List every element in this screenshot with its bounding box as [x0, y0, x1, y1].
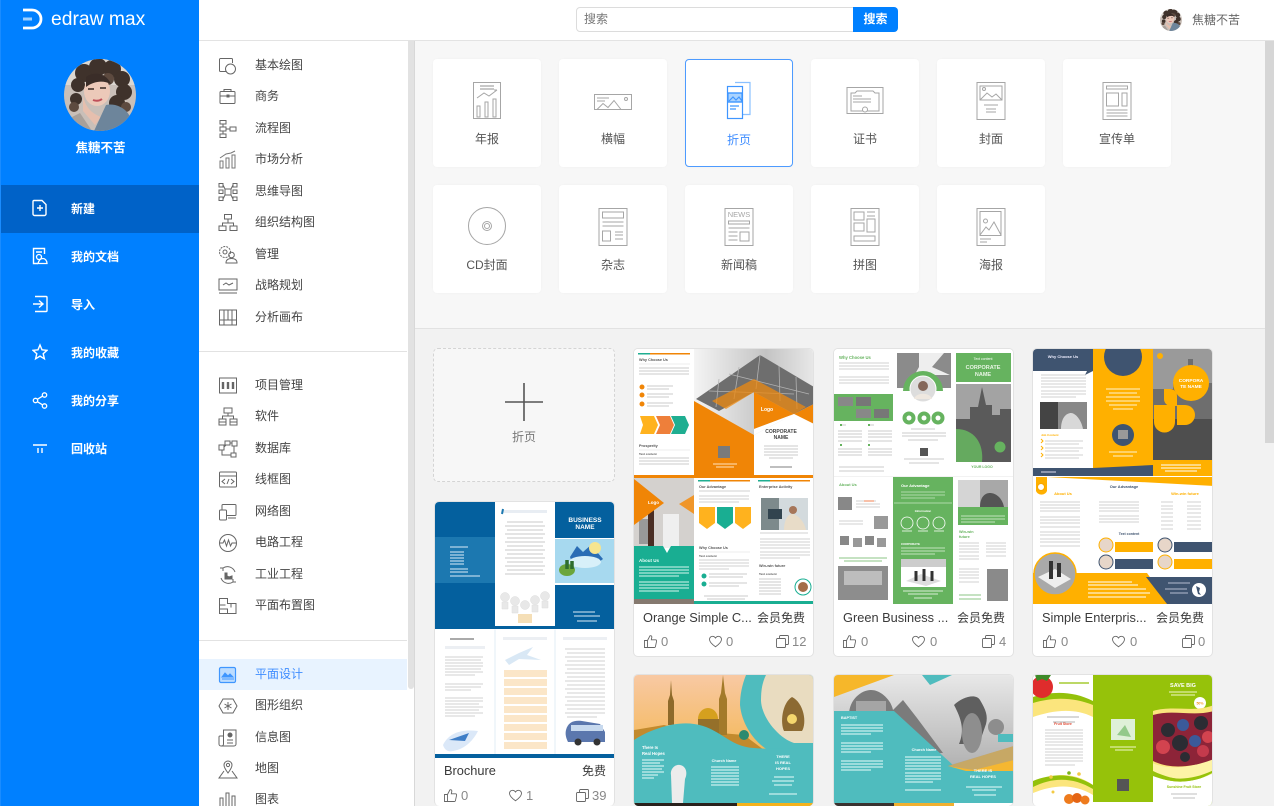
thumbnail: orange brochure: Win-win future — [759, 564, 785, 568]
template card: mosque brochure — [633, 674, 814, 806]
copy icon — [576, 789, 589, 802]
type card: 年报 — [433, 59, 541, 167]
category: 商务 — [220, 89, 279, 104]
thumbnail: green brochure: future — [959, 535, 970, 539]
category: 电路工程 — [219, 534, 303, 552]
thumbnail: church: BAPTIST — [841, 716, 858, 720]
price label: 免费 — [582, 764, 606, 778]
type card: 拼图 — [811, 185, 919, 293]
thumbnail: mosque: HOPES — [776, 766, 790, 771]
nav: 新建 active — [1, 185, 199, 233]
thumbnail: orange brochure: Prosperity — [639, 444, 659, 448]
thumbnail: fruit store: 50% — [1196, 702, 1204, 706]
page scrollbar — [1265, 41, 1274, 443]
category: 商务: 商务 — [255, 89, 279, 103]
category: 思维导图: 思维导图 — [255, 184, 303, 198]
category: 网络图: 网络图 — [255, 504, 291, 518]
thumbnail: church — [834, 675, 1014, 806]
thumbnail: orange brochure: Text content — [699, 554, 717, 558]
category: 管理 — [219, 246, 279, 264]
category: 信息图: 信息图 — [255, 730, 291, 744]
thumbnail: church: Church Name — [912, 748, 936, 752]
type card: 折页 active — [685, 59, 793, 167]
logo: edraw max — [51, 9, 145, 30]
heart icon — [912, 635, 925, 648]
category list panel — [199, 41, 415, 806]
heart count: 0 — [930, 634, 937, 649]
thumbnail: green brochure: Information — [915, 509, 931, 513]
thumbnail: green brochure: Why Choose Us — [839, 355, 872, 360]
thumbnail: blue brochure — [435, 502, 614, 758]
sidebar — [0, 0, 199, 806]
category: 线框图: 线框图 — [255, 472, 291, 486]
card title: Brochure — [444, 763, 496, 778]
category: 市场分析: 市场分析 — [255, 152, 303, 166]
category: 分析画布 — [219, 310, 303, 326]
like count: 0 — [661, 634, 668, 649]
type card: 新闻稿 — [685, 185, 793, 293]
thumbnail: blue brochure: NAME — [575, 524, 595, 531]
heart count: 0 — [726, 634, 733, 649]
thumbnail: yellow and navy brochure — [1033, 349, 1214, 605]
type card: 宣传单 — [1063, 59, 1171, 167]
thumbnail: fruit store: SAVE BIG — [1170, 683, 1196, 689]
thumbnail: yellow and navy brochure: Job Content — [1041, 433, 1058, 437]
category: 平面布置图: 平面布置图 — [255, 598, 315, 612]
thumbnail: yellow and navy brochure: Why Choose Us — [1048, 354, 1079, 359]
list scrollbar — [408, 41, 414, 689]
category: 平面布置图 — [219, 598, 315, 614]
price label: 会员免费 — [757, 611, 805, 625]
category: 平面设计 selected: 平面设计 — [255, 667, 303, 681]
thumbnail: fruit store: Fruit Store — [1054, 722, 1072, 726]
nav item: 我的收藏 — [32, 343, 119, 360]
nav item: 导入 — [33, 296, 95, 312]
thumbnail: yellow and navy brochure: TE NAME — [1180, 384, 1203, 390]
category: 电路工程: 电路工程 — [255, 535, 303, 549]
nav item: 我的分享 — [32, 392, 119, 409]
selected row background — [199, 659, 407, 690]
nav item: 回收站 — [33, 442, 107, 456]
type card: 证书: 证书 — [853, 132, 877, 146]
category: 组织结构图 — [218, 214, 315, 231]
card title: Orange Simple C... — [643, 610, 752, 625]
search input — [576, 7, 854, 32]
new template card — [433, 348, 615, 482]
template card: fruit brochure — [1032, 674, 1213, 806]
user avatar — [64, 59, 136, 131]
like icon — [843, 635, 856, 648]
heart icon — [1112, 635, 1125, 648]
price label: 会员免费 — [1156, 611, 1204, 625]
template card: Green Business — [833, 348, 1014, 657]
category: 分析画布: 分析画布 — [255, 310, 303, 324]
category: 项目管理 — [219, 378, 303, 394]
type card: 海报 — [937, 185, 1045, 293]
copy count: 4 — [999, 634, 1006, 649]
thumbnail: green brochure: Our Advantage — [901, 483, 930, 488]
thumbnail: orange brochure: Text content — [759, 572, 777, 576]
nav item: 我的文档 — [32, 248, 119, 264]
type card: 杂志 — [559, 185, 667, 293]
category: 图形组织: 图形组织 — [255, 698, 303, 712]
nav item: 导入: 导入 — [71, 298, 95, 312]
thumbnail: green brochure: Win-win — [959, 530, 974, 534]
type card: 横幅 — [559, 59, 667, 167]
type card: 封面: 封面 — [979, 132, 1003, 146]
type card: 新闻稿: NEWS — [728, 210, 750, 219]
thumbnail: mosque: Church Name — [712, 759, 736, 763]
category: 数据库 — [218, 440, 291, 458]
nav item: 回收站: 回收站 — [71, 442, 107, 456]
heart count: 0 — [1130, 634, 1137, 649]
category: 图表: 图表 — [255, 792, 279, 806]
card title: Green Business ... — [843, 610, 948, 625]
thumbnail: green brochure — [834, 349, 1014, 605]
type card: 拼图: 拼图 — [853, 258, 877, 272]
type card: 年报: 年报 — [475, 132, 499, 146]
copy icon — [776, 635, 789, 648]
thumbnail: orange brochure: Why Choose Us — [639, 358, 668, 362]
type card: 封面 — [937, 59, 1045, 167]
card title: Simple Enterpris... — [1042, 610, 1147, 625]
category: 战略规划 — [218, 278, 303, 294]
list divider 2 — [199, 640, 407, 641]
category: 流程图: 流程图 — [255, 121, 291, 135]
category: 信息图 — [218, 730, 291, 746]
thumbnail: blue brochure: BUSINESS — [568, 517, 602, 524]
heart icon — [509, 790, 522, 802]
thumbnail: yellow and navy brochure: Our Advantage — [1110, 484, 1139, 489]
category: 组织结构图: 组织结构图 — [255, 215, 315, 229]
new card label: 折页 — [512, 430, 536, 444]
category: 地图 — [218, 760, 279, 778]
thumbnail: mosque: THERE — [776, 754, 790, 759]
template card: Orange Simple — [633, 348, 814, 657]
type card: 杂志: 杂志 — [601, 258, 625, 272]
category: 基本绘图 — [219, 58, 303, 74]
category: 数据库: 数据库 — [255, 441, 291, 455]
thumbnail: green brochure: CORPORATE — [966, 365, 1001, 371]
nav item: 我的文档: 我的文档 — [71, 250, 119, 264]
category: 管理: 管理 — [255, 247, 279, 261]
thumbnail: green brochure: About Us — [839, 482, 858, 487]
copy icon — [1182, 635, 1195, 648]
thumbnail: orange brochure: Text content — [639, 452, 657, 456]
thumbnail: orange brochure — [634, 349, 813, 604]
search input: 搜索 — [584, 12, 608, 26]
heart icon — [709, 636, 722, 648]
thumbnail: orange brochure: CORPORATE — [765, 429, 797, 435]
type card: 证书 — [811, 59, 919, 167]
template card: Simple Enterprise — [1032, 348, 1213, 657]
category: 战略规划: 战略规划 — [255, 278, 303, 292]
category: 流程图 — [220, 120, 291, 138]
category: 思维导图 — [218, 183, 303, 201]
search button — [853, 7, 898, 32]
copy icon — [982, 635, 995, 648]
nav item: 新建: 新建 — [71, 202, 95, 216]
thumbnail: green brochure: CORPORATE — [901, 542, 920, 546]
type card: CD封面 — [433, 185, 541, 293]
category: 工业工程 — [220, 566, 303, 584]
category: 软件 — [218, 408, 279, 426]
category: 软件: 软件 — [255, 409, 279, 423]
type card: CD封面: CD封面 — [466, 258, 508, 272]
thumbnail: orange brochure: Logo — [761, 407, 773, 413]
template card: Brochure — [434, 501, 615, 806]
thumbnail: orange brochure: Our Advantage — [699, 485, 726, 489]
like icon — [444, 789, 457, 802]
thumbnail: green brochure: Text content — [974, 357, 992, 361]
nav item: 我的分享: 我的分享 — [71, 394, 119, 408]
search button: 搜索 — [863, 12, 888, 26]
category: 平面设计 selected — [218, 666, 303, 684]
nav item: 我的收藏: 我的收藏 — [71, 346, 119, 360]
thumbnail: orange brochure: Why Choose Us — [699, 546, 728, 550]
thumbnail: church: REAL HOPES — [970, 774, 996, 779]
thumbnail: mosque: There Is — [642, 745, 659, 750]
template type panel — [415, 41, 1265, 329]
thumbnail: green brochure: NAME — [975, 372, 991, 378]
plus icon — [505, 383, 543, 421]
thumbnail: yellow and navy brochure: CORPORA — [1179, 378, 1204, 384]
thumbnail: orange brochure: NAME — [774, 435, 789, 441]
type card: 折页 active: 折页 — [727, 133, 751, 147]
heart count: 1 — [526, 788, 533, 803]
thumbnail: fruit store: Sunshine Fruit Store — [1167, 785, 1201, 789]
user name: 焦糖不苦 — [75, 141, 126, 155]
category: 线框图 — [219, 472, 291, 488]
nav item: 新建 — [32, 200, 95, 216]
like count: 0 — [461, 788, 468, 803]
thumbnail: orange brochure: Enterprise Activity — [759, 485, 793, 489]
top user name: 焦糖不苦 — [1192, 13, 1240, 27]
top user avatar — [1160, 9, 1182, 31]
category: 项目管理: 项目管理 — [255, 378, 303, 392]
like count: 0 — [1061, 634, 1068, 649]
thumbnail: mosque — [634, 675, 814, 806]
category: 基本绘图: 基本绘图 — [255, 58, 303, 72]
thumbnail: yellow and navy brochure: Text content — [1119, 532, 1140, 536]
type card: 横幅: 横幅 — [601, 132, 625, 146]
thumbnail: mosque: Real Hopes — [642, 751, 665, 756]
top bar — [199, 0, 1274, 41]
thumbnail: green brochure: YOUR LOGO — [971, 465, 993, 469]
type card: 海报: 海报 — [979, 258, 1003, 272]
like icon — [1043, 635, 1056, 648]
type card: 宣传单: 宣传单 — [1099, 132, 1135, 146]
thumbnail: orange brochure: About Us — [639, 558, 659, 563]
copy count: 39 — [592, 788, 606, 803]
price label: 会员免费 — [957, 611, 1005, 625]
like count: 0 — [861, 634, 868, 649]
template card: church brochure — [833, 674, 1014, 806]
category: 工业工程: 工业工程 — [255, 567, 303, 581]
type card: 新闻稿: 新闻稿 — [721, 258, 757, 272]
list divider — [199, 351, 407, 352]
category: 图表 — [220, 792, 279, 806]
copy count: 0 — [1198, 634, 1205, 649]
category: 网络图 — [219, 504, 291, 520]
category: 地图: 地图 — [255, 761, 279, 775]
category: 图形组织 — [218, 698, 303, 714]
thumbnail: yellow and navy brochure: Win-win future — [1171, 491, 1200, 496]
thumbnail: yellow and navy brochure: About Us — [1054, 491, 1073, 496]
thumbnail: mosque: IS REAL — [775, 760, 791, 765]
thumbnail: church: THERE IS — [974, 768, 993, 773]
thumbnail: orange brochure: Logo — [648, 500, 659, 505]
like icon — [644, 635, 657, 648]
thumbnail: fruit store — [1033, 675, 1214, 806]
category: 市场分析 — [220, 150, 303, 168]
copy count: 12 — [792, 634, 806, 649]
